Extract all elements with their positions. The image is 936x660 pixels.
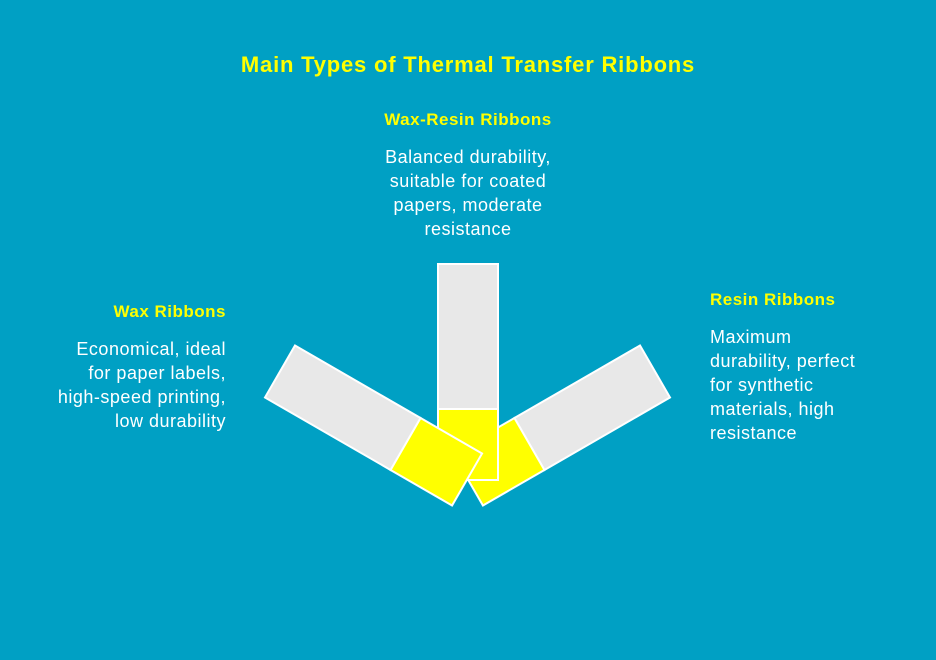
text: resin: materials, high <box>710 399 835 419</box>
title: Main Types of Thermal Transfer Ribbons <box>241 52 695 77</box>
text: wax-resin: suitable for coated <box>390 171 546 191</box>
text: wax: high-speed printing, <box>58 387 226 407</box>
text: resin <box>710 290 855 443</box>
text: resin: for synthetic <box>710 375 814 395</box>
text: wax: for paper labels, <box>88 363 226 383</box>
bar: wax-resin <box>438 264 498 480</box>
text: resin: durability, perfect <box>710 351 855 371</box>
bar: wax <box>265 346 482 505</box>
text: wax: Economical, ideal <box>76 339 226 359</box>
text: resin: Maximum <box>710 327 792 347</box>
text: wax-resin: Wax-Resin Ribbons <box>384 110 552 129</box>
bar: resin <box>453 346 670 505</box>
text: wax <box>58 302 226 431</box>
text: wax-resin: papers, moderate <box>393 195 543 215</box>
text: wax: Wax Ribbons <box>113 302 226 321</box>
text: wax: low durability <box>115 411 226 431</box>
text: wax-resin: resistance <box>424 219 512 239</box>
text: wax-resin: Balanced durability, <box>385 147 551 167</box>
text: wax-resin <box>384 110 552 239</box>
text: resin: Resin Ribbons <box>710 290 836 309</box>
text: resin: resistance <box>710 423 797 443</box>
